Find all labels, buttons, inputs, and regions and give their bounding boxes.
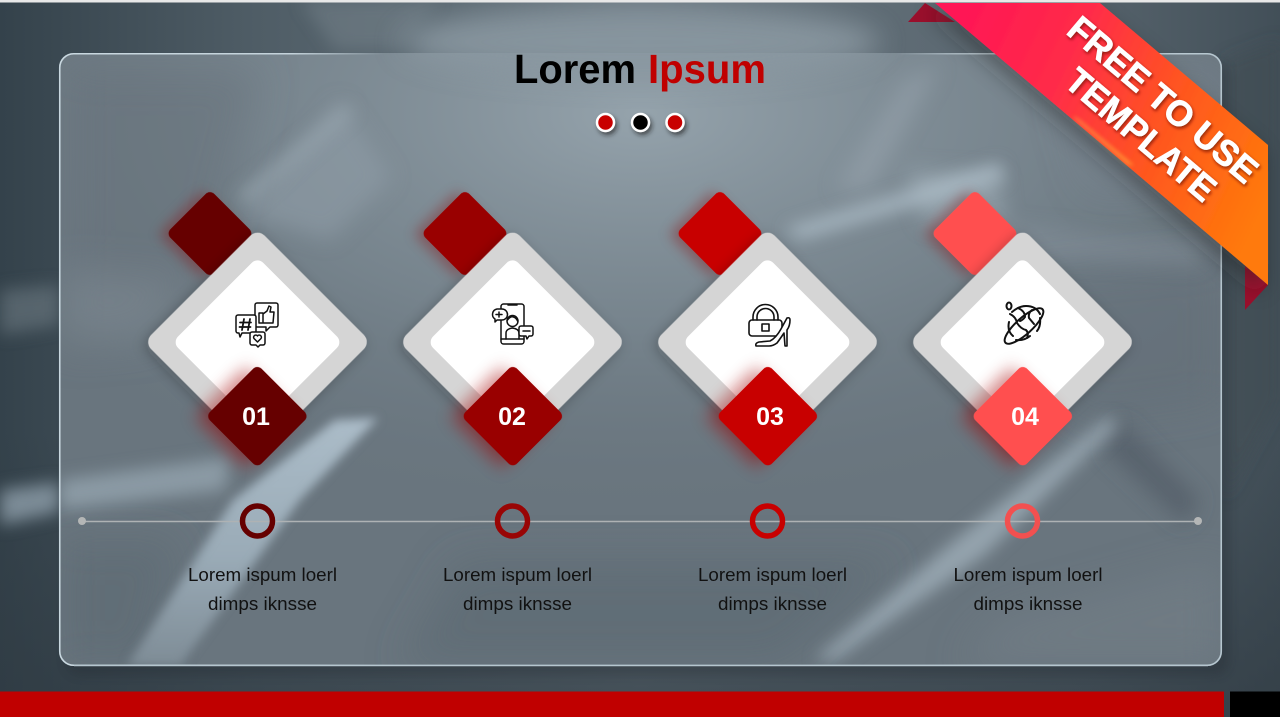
title dots xyxy=(597,114,684,131)
top centre glow xyxy=(400,6,880,78)
outer diamond 02 xyxy=(399,229,626,455)
text 03: Lorem ispum loerl xyxy=(698,565,847,585)
glass panel xyxy=(59,53,1229,675)
white diamond 04 xyxy=(937,257,1108,427)
title: Lorem xyxy=(514,46,636,92)
outer diamond 04 xyxy=(909,229,1136,455)
text 01: Lorem ispum loerl xyxy=(188,565,337,585)
ribbon text: TEMPLATE xyxy=(1058,59,1225,209)
text 04: dimps iknsse xyxy=(974,594,1082,614)
text 01 xyxy=(188,565,337,614)
icon: phone with person xyxy=(493,304,533,344)
ring 03 xyxy=(752,506,782,536)
number diamond 01 xyxy=(206,365,309,468)
card 04 xyxy=(909,190,1136,614)
white diamond 01 xyxy=(172,257,343,427)
ribbon fold left xyxy=(908,3,955,22)
outer diamond 03 xyxy=(654,229,881,455)
timeline line xyxy=(78,517,1202,525)
text 03 xyxy=(698,565,847,614)
text 03: dimps iknsse xyxy=(718,594,827,614)
ribbon band xyxy=(935,3,1268,285)
ribbon highlight xyxy=(1072,116,1134,166)
card 01 xyxy=(144,190,371,614)
ribbon fold right xyxy=(1245,266,1268,310)
number 01: 01 xyxy=(242,403,270,431)
white diamond 02 xyxy=(427,257,598,427)
outer diamond 01 xyxy=(144,229,371,455)
text 02: dimps iknsse xyxy=(463,594,572,614)
number 03: 03 xyxy=(756,403,784,431)
text 02 xyxy=(443,565,592,614)
ring 04 xyxy=(1008,506,1038,536)
number diamond 04 xyxy=(971,365,1074,468)
icon: social chat bubbles xyxy=(236,303,278,347)
back diamond 04 xyxy=(931,190,1019,277)
text 04 xyxy=(954,565,1102,614)
card 03 xyxy=(654,190,881,614)
text 01: dimps iknsse xyxy=(208,594,317,614)
back diamond 03 xyxy=(676,190,764,277)
title: Ipsum xyxy=(648,46,766,92)
ring 02 xyxy=(498,506,528,536)
icon: globe with orbit xyxy=(1000,302,1048,349)
icon: handbag and high heel xyxy=(749,304,790,346)
number diamond 03 xyxy=(716,365,819,468)
number 04: 04 xyxy=(1011,403,1039,431)
ring 01 xyxy=(242,506,272,536)
ribbon text: FREE TO USE xyxy=(1060,8,1266,191)
white diamond 03 xyxy=(682,257,853,427)
card 02 xyxy=(399,190,626,614)
ribbon xyxy=(908,3,1268,310)
back diamond 02 xyxy=(421,190,509,277)
text 02: Lorem ispum loerl xyxy=(443,565,592,585)
number 02: 02 xyxy=(498,403,526,431)
title xyxy=(514,46,766,92)
back diamond 01 xyxy=(166,190,254,277)
text 04: Lorem ispum loerl xyxy=(954,565,1102,585)
number diamond 02 xyxy=(461,365,564,468)
